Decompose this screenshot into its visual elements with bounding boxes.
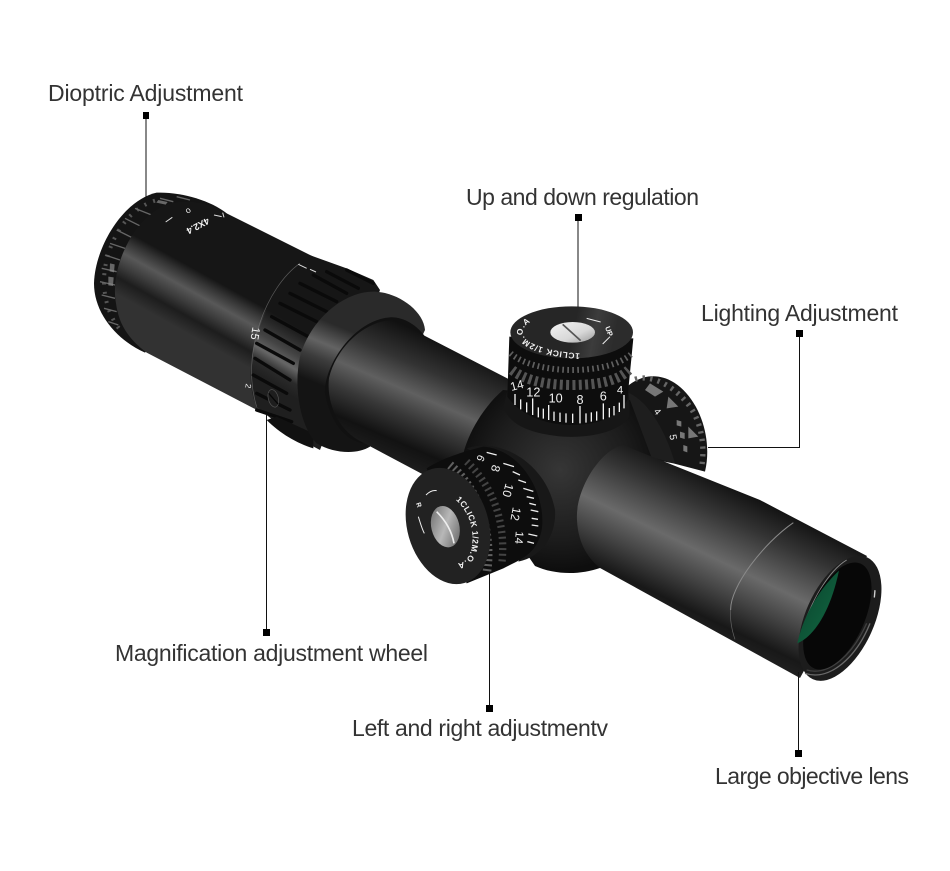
- eyepiece section: [94, 193, 353, 415]
- left turret scale: [473, 452, 538, 544]
- lighting adjustment knob: 5: [666, 434, 678, 441]
- lighting adjustment knob: [603, 376, 707, 472]
- cap engraving: [516, 318, 615, 359]
- callout: Lighting Adjustment: Lighting Adjustment: [701, 300, 899, 326]
- top turret scale: 14: [509, 377, 526, 394]
- top turret scale: 6: [600, 390, 607, 404]
- top turret scale: [509, 377, 624, 423]
- left turret scale: 12: [507, 506, 524, 522]
- left cap engraving: [414, 490, 479, 568]
- top turret scale: 10: [549, 392, 563, 406]
- wheel marks: [243, 264, 316, 408]
- callout: Left and right adjustmentv: Left and right adjustmentv: [352, 715, 608, 741]
- objective bell seam and lens: [731, 523, 898, 693]
- main centre tube: [329, 320, 530, 510]
- left turret scale: 10: [499, 482, 516, 499]
- turret cap: [510, 306, 633, 358]
- cap engraving: 1CLICK 1/2M.O.A: [516, 318, 580, 359]
- callout: Magnification adjustment wheel: Magnification adjustment wheel: [115, 640, 428, 666]
- left turret cap: [393, 458, 503, 594]
- lighting adjustment knob: 4: [652, 407, 663, 417]
- callout: Up and down regulation: Up and down regulation: [466, 184, 699, 210]
- front tube: [577, 445, 867, 678]
- lens ring: [782, 543, 898, 693]
- left turret scale: 14: [512, 531, 525, 544]
- eyepiece markings: 4X2.4: [184, 216, 211, 236]
- wheel collar: [297, 292, 425, 452]
- top turret scale: 12: [526, 386, 540, 400]
- left turret scale: 8: [488, 463, 503, 474]
- knurled side: [450, 465, 488, 573]
- left turret: left and right adjustment: [406, 447, 555, 584]
- top turret: up and down regulation: [508, 306, 634, 437]
- magnification adjustment wheel: [243, 254, 380, 450]
- wheel marks: 15: [248, 326, 262, 341]
- cap screw: [550, 322, 595, 343]
- top turret scale: 8: [576, 393, 584, 407]
- callout: Large objective lens: [715, 672, 909, 789]
- top turret scale: 4: [617, 384, 623, 396]
- callout: Dioptric Adjustment: [48, 80, 244, 198]
- callout: Magnification adjustment wheel: [115, 414, 428, 666]
- left cap engraving: R: [414, 502, 422, 509]
- cap engraving: UP: [603, 325, 615, 338]
- callout: Lighting Adjustment: [701, 300, 899, 448]
- eyepiece markings: [166, 206, 224, 236]
- callout: Left and right adjustmentv: [352, 574, 608, 741]
- callout: Up and down regulation: [466, 184, 699, 307]
- left cap engraving: 1CLICK 1/2M.O.A: [456, 496, 479, 568]
- green lens glass: [797, 571, 839, 643]
- wheel marks: 2: [243, 383, 253, 389]
- turret housing: [462, 390, 660, 573]
- callout: Large objective lens: Large objective lens: [715, 763, 909, 789]
- left cap screw: [427, 503, 464, 550]
- callout: Dioptric Adjustment: Dioptric Adjustment: [48, 80, 244, 106]
- left turret scale: 6: [473, 453, 487, 463]
- rifle scope: [94, 192, 882, 681]
- eyepiece markings: o: [184, 206, 194, 217]
